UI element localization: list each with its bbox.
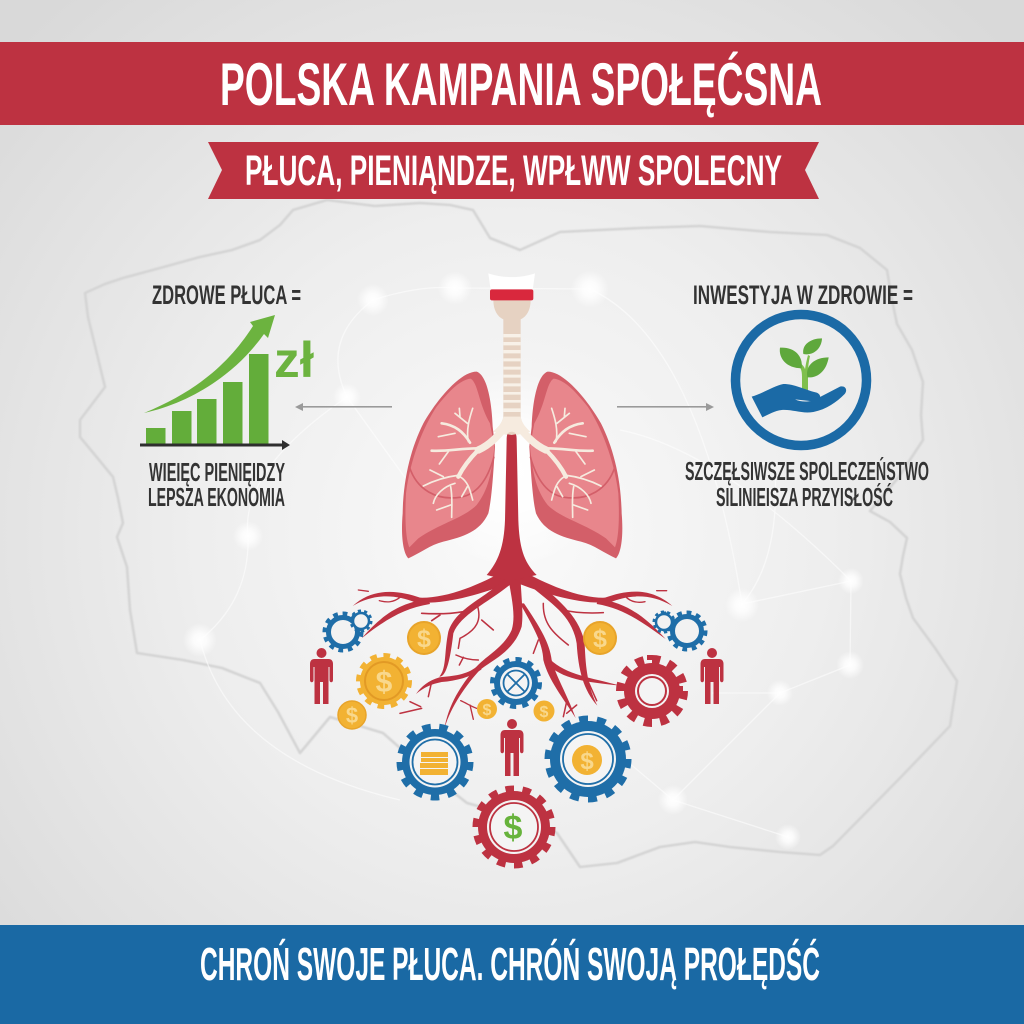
- person: centre: [500, 719, 524, 776]
- title banner: [0, 42, 1024, 125]
- coin: lower left: $: [346, 703, 358, 728]
- coin: small centre left: $: [483, 702, 492, 719]
- blood vessel stem: [487, 432, 537, 580]
- person: left: [310, 648, 333, 704]
- coin: upper right: $: [593, 625, 607, 653]
- glowing network nodes: [183, 270, 864, 850]
- map of Poland outline: [80, 200, 957, 867]
- arrow to the right panel: [617, 403, 714, 411]
- gear: lower right blue with coin: [548, 719, 628, 799]
- gear: bottom red with green dollar: [476, 789, 552, 865]
- footer band: [0, 925, 1024, 1024]
- gear: bottom red with green dollar: $: [504, 809, 523, 847]
- right lung: [513, 372, 622, 558]
- coin: lower left: [338, 701, 366, 729]
- caption: better economy: LEPSZA EKONOMIA: [148, 482, 285, 512]
- coin: small centre left: [477, 699, 497, 719]
- coin: small centre right: [534, 700, 554, 722]
- trachea: [488, 273, 535, 435]
- heading: healthy lungs: ZDROWE PŁUCA =: [152, 280, 301, 310]
- network of light connections: [200, 288, 851, 837]
- currency symbol: zł: [274, 332, 314, 388]
- coin: upper right: [584, 622, 616, 654]
- gear: lower left blue with coin stack: [400, 727, 470, 797]
- gear pair: right blue: [654, 612, 705, 649]
- gear: lower right blue with coin: $: [580, 748, 594, 775]
- gear: right red: [621, 660, 683, 722]
- gear pair: left blue: [325, 611, 371, 650]
- subtitle ribbon: [208, 142, 819, 199]
- gears, coins and people: [310, 611, 724, 865]
- red roots of the lungs: [353, 568, 672, 731]
- coin: small centre right: $: [540, 704, 549, 721]
- left lung: [402, 372, 512, 558]
- icon: hand holding sprout: [736, 314, 866, 446]
- gold gear with dollar: $: [376, 666, 393, 699]
- coin: upper left: [408, 622, 440, 654]
- right panel: investment in health: [685, 280, 929, 512]
- bar chart: growth: [140, 315, 290, 450]
- caption: more money: WIEIĘC PIENIĘIDZY: [149, 457, 285, 487]
- person: right: [700, 648, 724, 704]
- gold gear with dollar: [359, 656, 409, 706]
- gear: centre blue with cross: [493, 660, 539, 706]
- left panel: healthy lungs and economy: [140, 280, 314, 512]
- lungs and trachea: [402, 273, 622, 580]
- coin: upper left: $: [417, 625, 431, 653]
- arrow to the left panel: [295, 403, 392, 411]
